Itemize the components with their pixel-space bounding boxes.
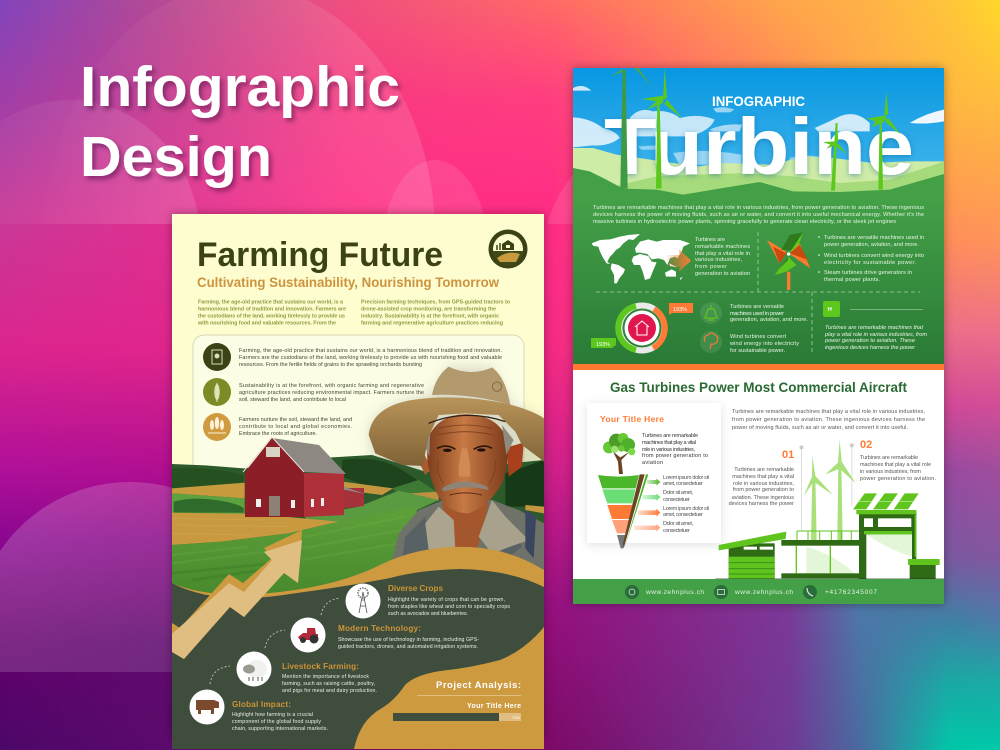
- text: farmers: contribute to local and global economies.: [239, 424, 352, 430]
- gold corner blob: [354, 627, 544, 749]
- funnel chart: [598, 474, 648, 548]
- funnel labels: Lorem ipsum dolor sit: [663, 475, 709, 481]
- sky: [573, 68, 944, 193]
- text: tradition: [239, 348, 502, 368]
- poster: farming future: [172, 214, 544, 749]
- text: versatile: generation, aviation, and more.: [730, 317, 808, 323]
- step: diverse crops: from staples like wheat and corn to specialty crops: [388, 604, 510, 610]
- text: 01: machines that play a vital: [732, 474, 794, 480]
- step: diverse crops: Diverse Crops: [388, 584, 443, 593]
- intro text: [593, 205, 924, 225]
- step: diverse crops: [346, 584, 510, 618]
- text: 02: Turbines are remarkable: [860, 455, 918, 461]
- text: 01: role in various industries,: [733, 481, 794, 487]
- footer: [573, 579, 944, 604]
- project analysis: Your Title Here: [467, 703, 521, 710]
- text: sustainability: Sustainability is at the forefront, with organic farming and regenerative: [239, 383, 424, 389]
- bullets: Turbines are versatile machines used in: [824, 235, 924, 241]
- intro column right: [361, 300, 511, 326]
- quote text: power generation to aviation. These: [824, 338, 915, 344]
- funnel labels: Dolor sit amet,: [663, 490, 693, 496]
- funnel labels: [663, 475, 709, 534]
- step: global impact: [190, 690, 328, 732]
- text: farmers: Embrace the roots of agriculture.: [239, 431, 317, 437]
- text: 01: 01: [782, 449, 794, 461]
- progress bar: 75%: [512, 715, 520, 720]
- funnel arrows: [634, 478, 660, 532]
- map text: from power: [695, 264, 727, 270]
- step: modern technology: guided tractors, drones, and automated irrigation systems.: [338, 644, 478, 650]
- step: livestock farming: farming, such as raising cattle, poultry,: [282, 681, 375, 687]
- map text: Turbines are: [695, 237, 725, 243]
- hat shadow: [369, 367, 544, 493]
- quote icon: [823, 301, 840, 318]
- title: Farming Future: [197, 236, 443, 274]
- intro column right: industry. Sustainability is at the forefront, with organic: [361, 314, 499, 320]
- intro column left: harmonious blend of tradition and innovation. Farmers are: [198, 306, 346, 312]
- text: versatile: Turbines are versatile: [730, 304, 784, 310]
- tag: orange 193: 193%: [673, 307, 687, 313]
- intro column right: drone-assisted crop monitoring, are transforming the: [361, 306, 496, 312]
- map arrow: [667, 249, 691, 272]
- bullets: Steam turbines drive generators in: [824, 270, 912, 276]
- right paragraph: power of moving fluids, such as air or water, and convert it into useful.: [732, 425, 908, 431]
- text: tradition: resources. From the fertile fields of grains to the sprawling orchards bursting: [239, 362, 422, 368]
- light turbines: [799, 440, 856, 540]
- main heading: Design: [80, 125, 272, 189]
- right paragraph: Turbines are remarkable machines that play a vital role in various industries,: [732, 409, 925, 415]
- intro column right: Precision farming techniques, from GPS-guided tractors to: [361, 300, 511, 306]
- intro column left: with nourishing food and valuable resources. From the: [197, 320, 336, 326]
- text: sustainability: agriculture practices reducing environmental impact. Farmers nurture the: [239, 390, 424, 396]
- subtitle: Cultivating Sustainability, Nourishing Tomorrow: [197, 275, 499, 290]
- poster backing: [573, 68, 944, 604]
- right paragraph: from power generation to aviation. These ingenious devices harness the: [732, 417, 925, 423]
- main heading: [80, 55, 400, 189]
- foreground hill: [573, 168, 944, 235]
- bullets: power generation, aviation, and more.: [824, 242, 919, 248]
- green panel: [573, 200, 944, 364]
- quote text: Turbines are remarkable machines that: [825, 325, 923, 331]
- bottom wave gold: [172, 547, 544, 749]
- card text: [642, 433, 708, 466]
- map text: that play a vital role in: [695, 251, 750, 257]
- section title: Gas Turbines Power Most Commercial Aircraft: [610, 380, 907, 395]
- text: 02: 02: [860, 439, 872, 451]
- card text: role in various industries,: [642, 447, 695, 453]
- landscape photo: [172, 455, 544, 627]
- funnel labels: Dolor sit amet,: [663, 521, 693, 527]
- quote text: play a vital role in various industries, from: [824, 332, 927, 338]
- funnel labels: Lorem ipsum dolor sit: [663, 506, 709, 512]
- intro column left: the custodians of the land, working tirelessly to provide us: [198, 314, 345, 320]
- title: turbine: Turbine: [604, 102, 914, 191]
- icon: pinwheel: [767, 232, 810, 290]
- text: versatile: [730, 304, 808, 323]
- wind turbines: [610, 68, 901, 191]
- text: farmers: [239, 417, 352, 437]
- step: diverse crops: Highlight the variety of crops that can be grown,: [388, 597, 505, 603]
- bullets: thermal power plants.: [824, 277, 880, 283]
- text: versatile: machines used in power: [730, 311, 784, 317]
- intro column right: farming and regenerative agriculture practices reducing: [361, 320, 503, 326]
- quote text: [824, 325, 927, 351]
- text: 01: [729, 449, 794, 507]
- icon: wheat: [203, 378, 231, 406]
- card text: machines that play a vital: [642, 440, 696, 446]
- project analysis: [393, 680, 521, 721]
- intro text: massive turbines in hydroelectric power plants, spinning gracefully to generate clean electricity, or the sleek jet engines: [593, 219, 896, 225]
- text: farmers: Farmers nurture the soil, steward the land, and: [239, 417, 352, 423]
- title: infographic: INFOGRAPHIC: [712, 94, 805, 109]
- bullets: [818, 235, 924, 283]
- background blobs: [0, 0, 573, 672]
- text: wind: [729, 334, 799, 354]
- map text: [695, 237, 750, 277]
- main heading: Infographic: [80, 55, 400, 119]
- rounded content panel: [193, 335, 524, 485]
- text: 01: from power generation to: [733, 487, 794, 493]
- tag: green 193: [591, 338, 616, 348]
- text: 02: machines that play a vital role: [860, 462, 931, 468]
- step: livestock farming: Livestock Farming:: [282, 662, 359, 671]
- card text: aviation: [642, 460, 663, 466]
- funnel labels: amet, consectetuer: [663, 481, 703, 487]
- right paragraph: [732, 409, 925, 431]
- footer: www.zehnplus.ch: [734, 589, 793, 596]
- step: livestock farming: Mention the importance of livestock: [282, 674, 369, 680]
- map text: remarkable machines: [695, 244, 750, 250]
- icon: tree: [603, 433, 635, 474]
- step: livestock farming: and pigs for meat and dairy production.: [282, 688, 377, 694]
- text: 02: [860, 439, 936, 482]
- text: 01: Turbines are remarkable: [734, 467, 794, 473]
- green building: [715, 493, 944, 579]
- card: [587, 403, 721, 548]
- step: modern technology: Showcase the use of technology in farming, including GPS-: [338, 637, 479, 643]
- step dotted connectors: [210, 598, 340, 684]
- text: 01: devices harness the power: [729, 501, 794, 507]
- growth arrow: [172, 530, 302, 659]
- tag: green 193: 193%: [596, 342, 610, 348]
- card text: Turbines are remarkable: [642, 433, 698, 439]
- orange band: [573, 364, 944, 370]
- red barn: [243, 437, 365, 517]
- tag: orange 193: [669, 303, 693, 315]
- intro column left: [197, 300, 346, 326]
- text: 02: power generation to aviation.: [860, 476, 936, 482]
- text: wind: wind energy into electricity: [729, 341, 799, 347]
- text: wind: for sustainable power.: [730, 348, 785, 354]
- bullets: Wind turbines convert wind energy into: [824, 253, 924, 259]
- icon: crops: [203, 413, 231, 441]
- text: 02: in various industries, from: [860, 469, 921, 475]
- dashed dividers: [596, 232, 920, 355]
- footer: www.zehnplus.ch: [645, 589, 704, 596]
- donut chart: [618, 306, 665, 350]
- funnel labels: amet, consectetuer: [663, 512, 703, 518]
- hills: [573, 148, 944, 235]
- poster shadow: [172, 214, 544, 739]
- step: diverse crops: such as avocados and blueberries.: [388, 611, 468, 617]
- quote rule: [850, 308, 923, 311]
- footer: +41762345007: [825, 589, 877, 596]
- poster: turbine: [573, 68, 944, 604]
- bottom panel dark: [172, 569, 544, 749]
- text: sustainability: [239, 383, 424, 403]
- text: wind: Wind turbines convert: [730, 334, 786, 340]
- clouds: [573, 86, 944, 165]
- project analysis: Project Analysis:: [436, 680, 521, 691]
- funnel labels: consectetuer: [663, 528, 690, 534]
- step: global impact: component of the global food supply: [232, 719, 321, 725]
- text: tradition: Farmers are the custodians of the land, working tirelessly to provide us with nourishing food and valuable: [239, 355, 502, 361]
- step: global impact: Highlight how farming is a crucial: [232, 712, 313, 718]
- quote icon: ”: [827, 306, 832, 318]
- icon: tree: [700, 331, 722, 353]
- step: modern technology: [290, 618, 479, 652]
- icon: certificate: [203, 343, 231, 371]
- intro text: devices harness the power of moving fluids, such as air or water, and convert it into useful mechanical energy. Whether it's the: [593, 212, 924, 218]
- step: livestock farming: [236, 652, 377, 694]
- step: global impact: chain, supporting international markets.: [232, 726, 328, 732]
- text: sustainability: soil, steward the land, and contribute to local: [239, 397, 346, 403]
- farmer portrait: [369, 367, 544, 627]
- map text: various industries,: [695, 257, 742, 263]
- funnel labels: consectetuer: [663, 497, 690, 503]
- card text: from power generation to: [642, 453, 708, 459]
- bullets: electricity for sustainable power.: [824, 260, 916, 266]
- card title: Your Title Here: [600, 414, 664, 424]
- intro text: Turbines are remarkable machines that play a vital role in various industries, from power generation to aviation. These ingenious: [593, 205, 924, 211]
- quote text: ingenious devices harness the power: [825, 345, 916, 351]
- world map: [592, 234, 690, 283]
- map text: generation to aviation: [695, 271, 750, 277]
- step: global impact: Global Impact:: [232, 700, 291, 709]
- logo badge: [488, 230, 528, 268]
- text: 01: aviation. These ingenious: [732, 495, 794, 501]
- step: modern technology: Modern Technology:: [338, 624, 421, 633]
- text: tradition: Farming, the age-old practice that sustains our world, is a harmonious blend of tradition and innovation.: [239, 348, 502, 354]
- intro column left: Farming, the age-old practice that sustains our world, is a: [198, 300, 344, 306]
- icon: solar: [700, 302, 722, 324]
